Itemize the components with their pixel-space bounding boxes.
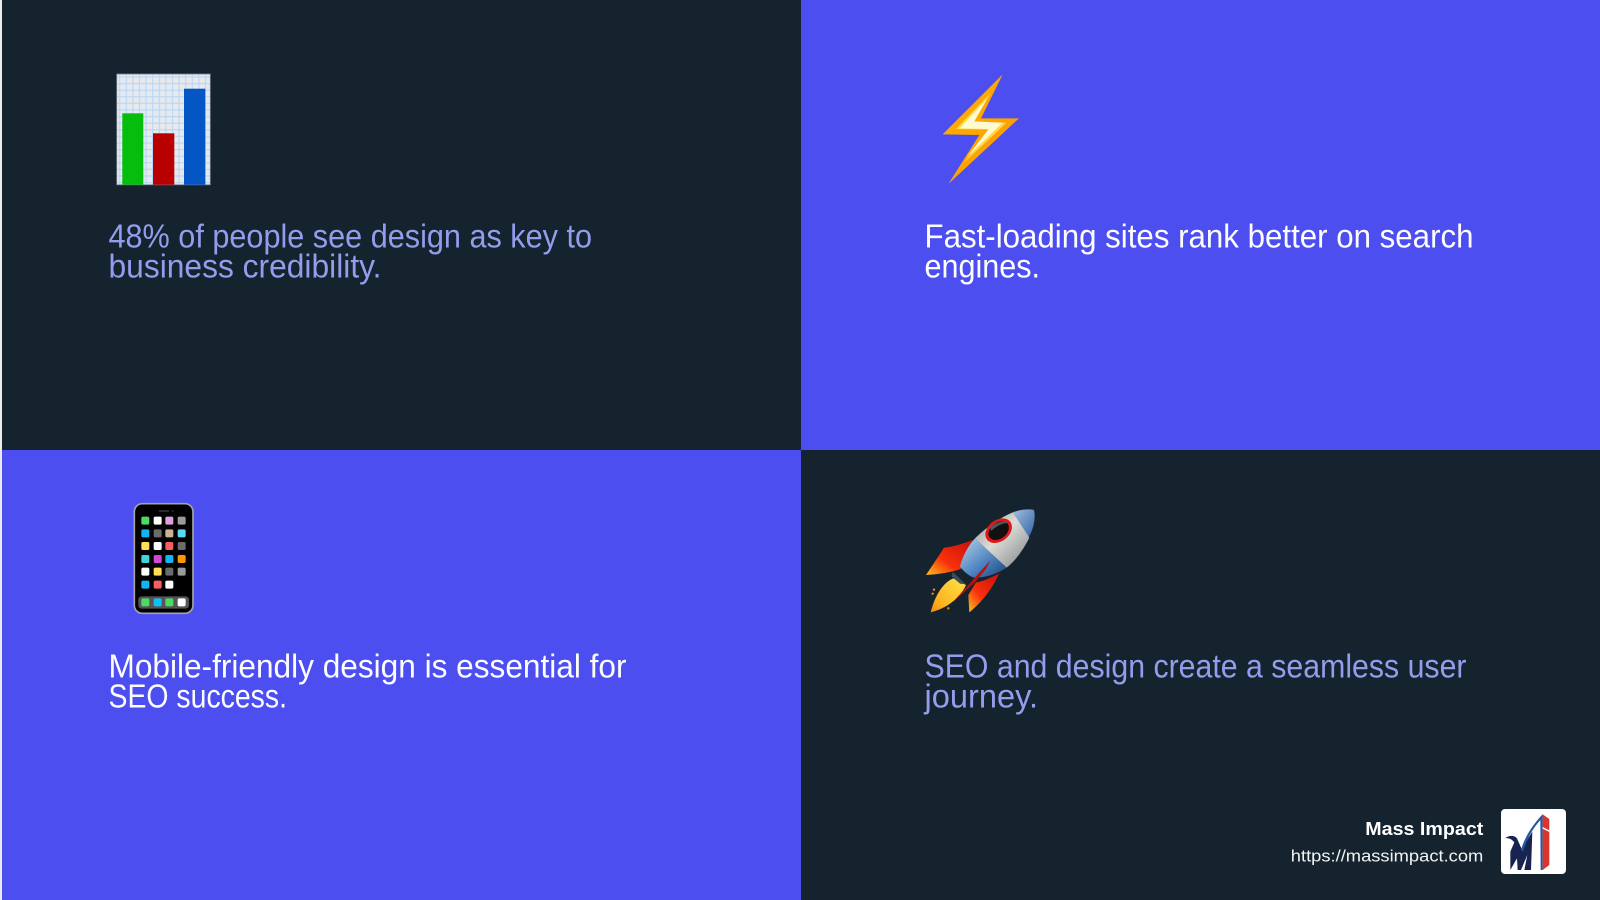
- icon: lightning bolt: [943, 74, 1019, 184]
- text: fast loading statement: engines.: [924, 248, 1040, 284]
- logo: [1501, 809, 1566, 874]
- panel: mobile friendly: [2, 450, 801, 900]
- text: seamless journey statement: journey.: [924, 678, 1038, 714]
- panel: seamless journey: [801, 450, 1600, 900]
- text: design credibility statistic: business credibility.: [108, 248, 382, 284]
- icon: rocket: [926, 509, 1035, 612]
- text: mobile friendly statement: SEO success.: [108, 678, 287, 714]
- icon: smartphone: [134, 504, 193, 613]
- icon: bar chart: [117, 74, 210, 185]
- brand name: Mass Impact: [1365, 818, 1483, 839]
- panel: design credibility: [2, 0, 801, 450]
- panel: fast loading: [801, 0, 1600, 450]
- text: fast loading statement: Fast-loading sites rank better on search: [924, 218, 1474, 254]
- brand url: https://massimpact.com: [1291, 846, 1483, 866]
- text: mobile friendly statement: Mobile-friendly design is essential for: [108, 648, 627, 684]
- brand block: Mass Impact: [1291, 809, 1566, 874]
- text: seamless journey statement: SEO and design create a seamless user: [924, 648, 1467, 684]
- text: design credibility statistic: 48% of people see design as key to: [108, 218, 592, 254]
